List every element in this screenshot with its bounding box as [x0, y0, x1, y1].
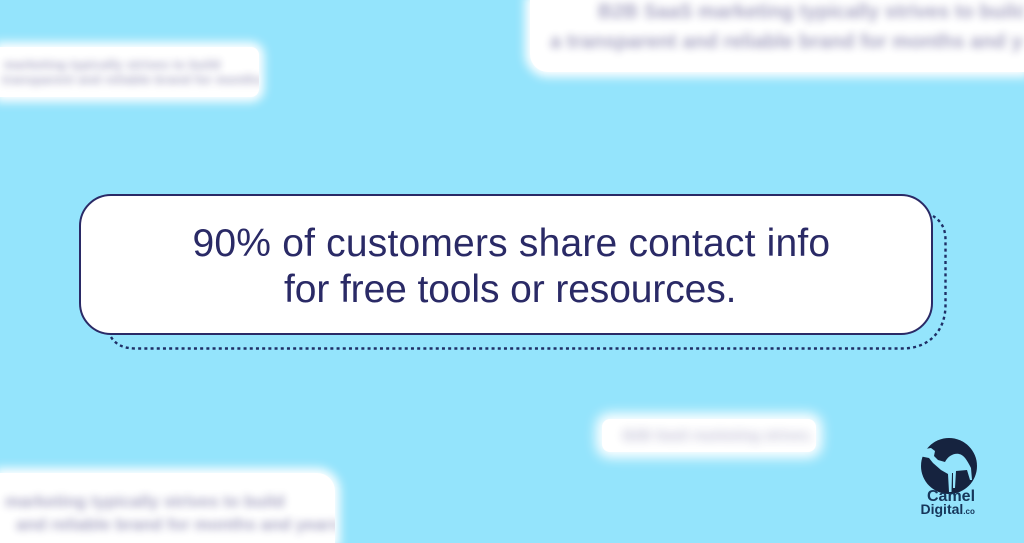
- blurred card: bottom right: B2B SaaS marketing strives.: [623, 427, 813, 443]
- blurred card: bottom left: marketing typically strives to build: [5, 492, 285, 511]
- logo wordmark: Camel: [927, 488, 975, 505]
- blurred card: top left: marketing typically strives to build: [4, 58, 220, 72]
- blurred card: top left: [0, 47, 259, 97]
- blurred card: bottom left: [0, 473, 335, 543]
- callout text: 90% of customers share contact info: [192, 222, 830, 265]
- blurred card: top left: transparent and reliable brand for months: [2, 73, 259, 87]
- blurred card: top right: B2B SaaS marketing typically strives to build: [598, 1, 1024, 23]
- callout text: for free tools or resources.: [284, 268, 736, 311]
- icon: camel in circle: [921, 438, 977, 494]
- blurred card: bottom left: and reliable brand for months and years: [16, 515, 335, 534]
- blurred card: bottom right: [602, 419, 816, 452]
- logo wordmark: Digital.co: [920, 501, 975, 517]
- callout text: [192, 222, 830, 311]
- main callout card: [79, 194, 933, 335]
- logo wordmark: [920, 488, 975, 517]
- logo: Camel Digital: [920, 438, 977, 517]
- blurred card: top right: [530, 0, 1024, 72]
